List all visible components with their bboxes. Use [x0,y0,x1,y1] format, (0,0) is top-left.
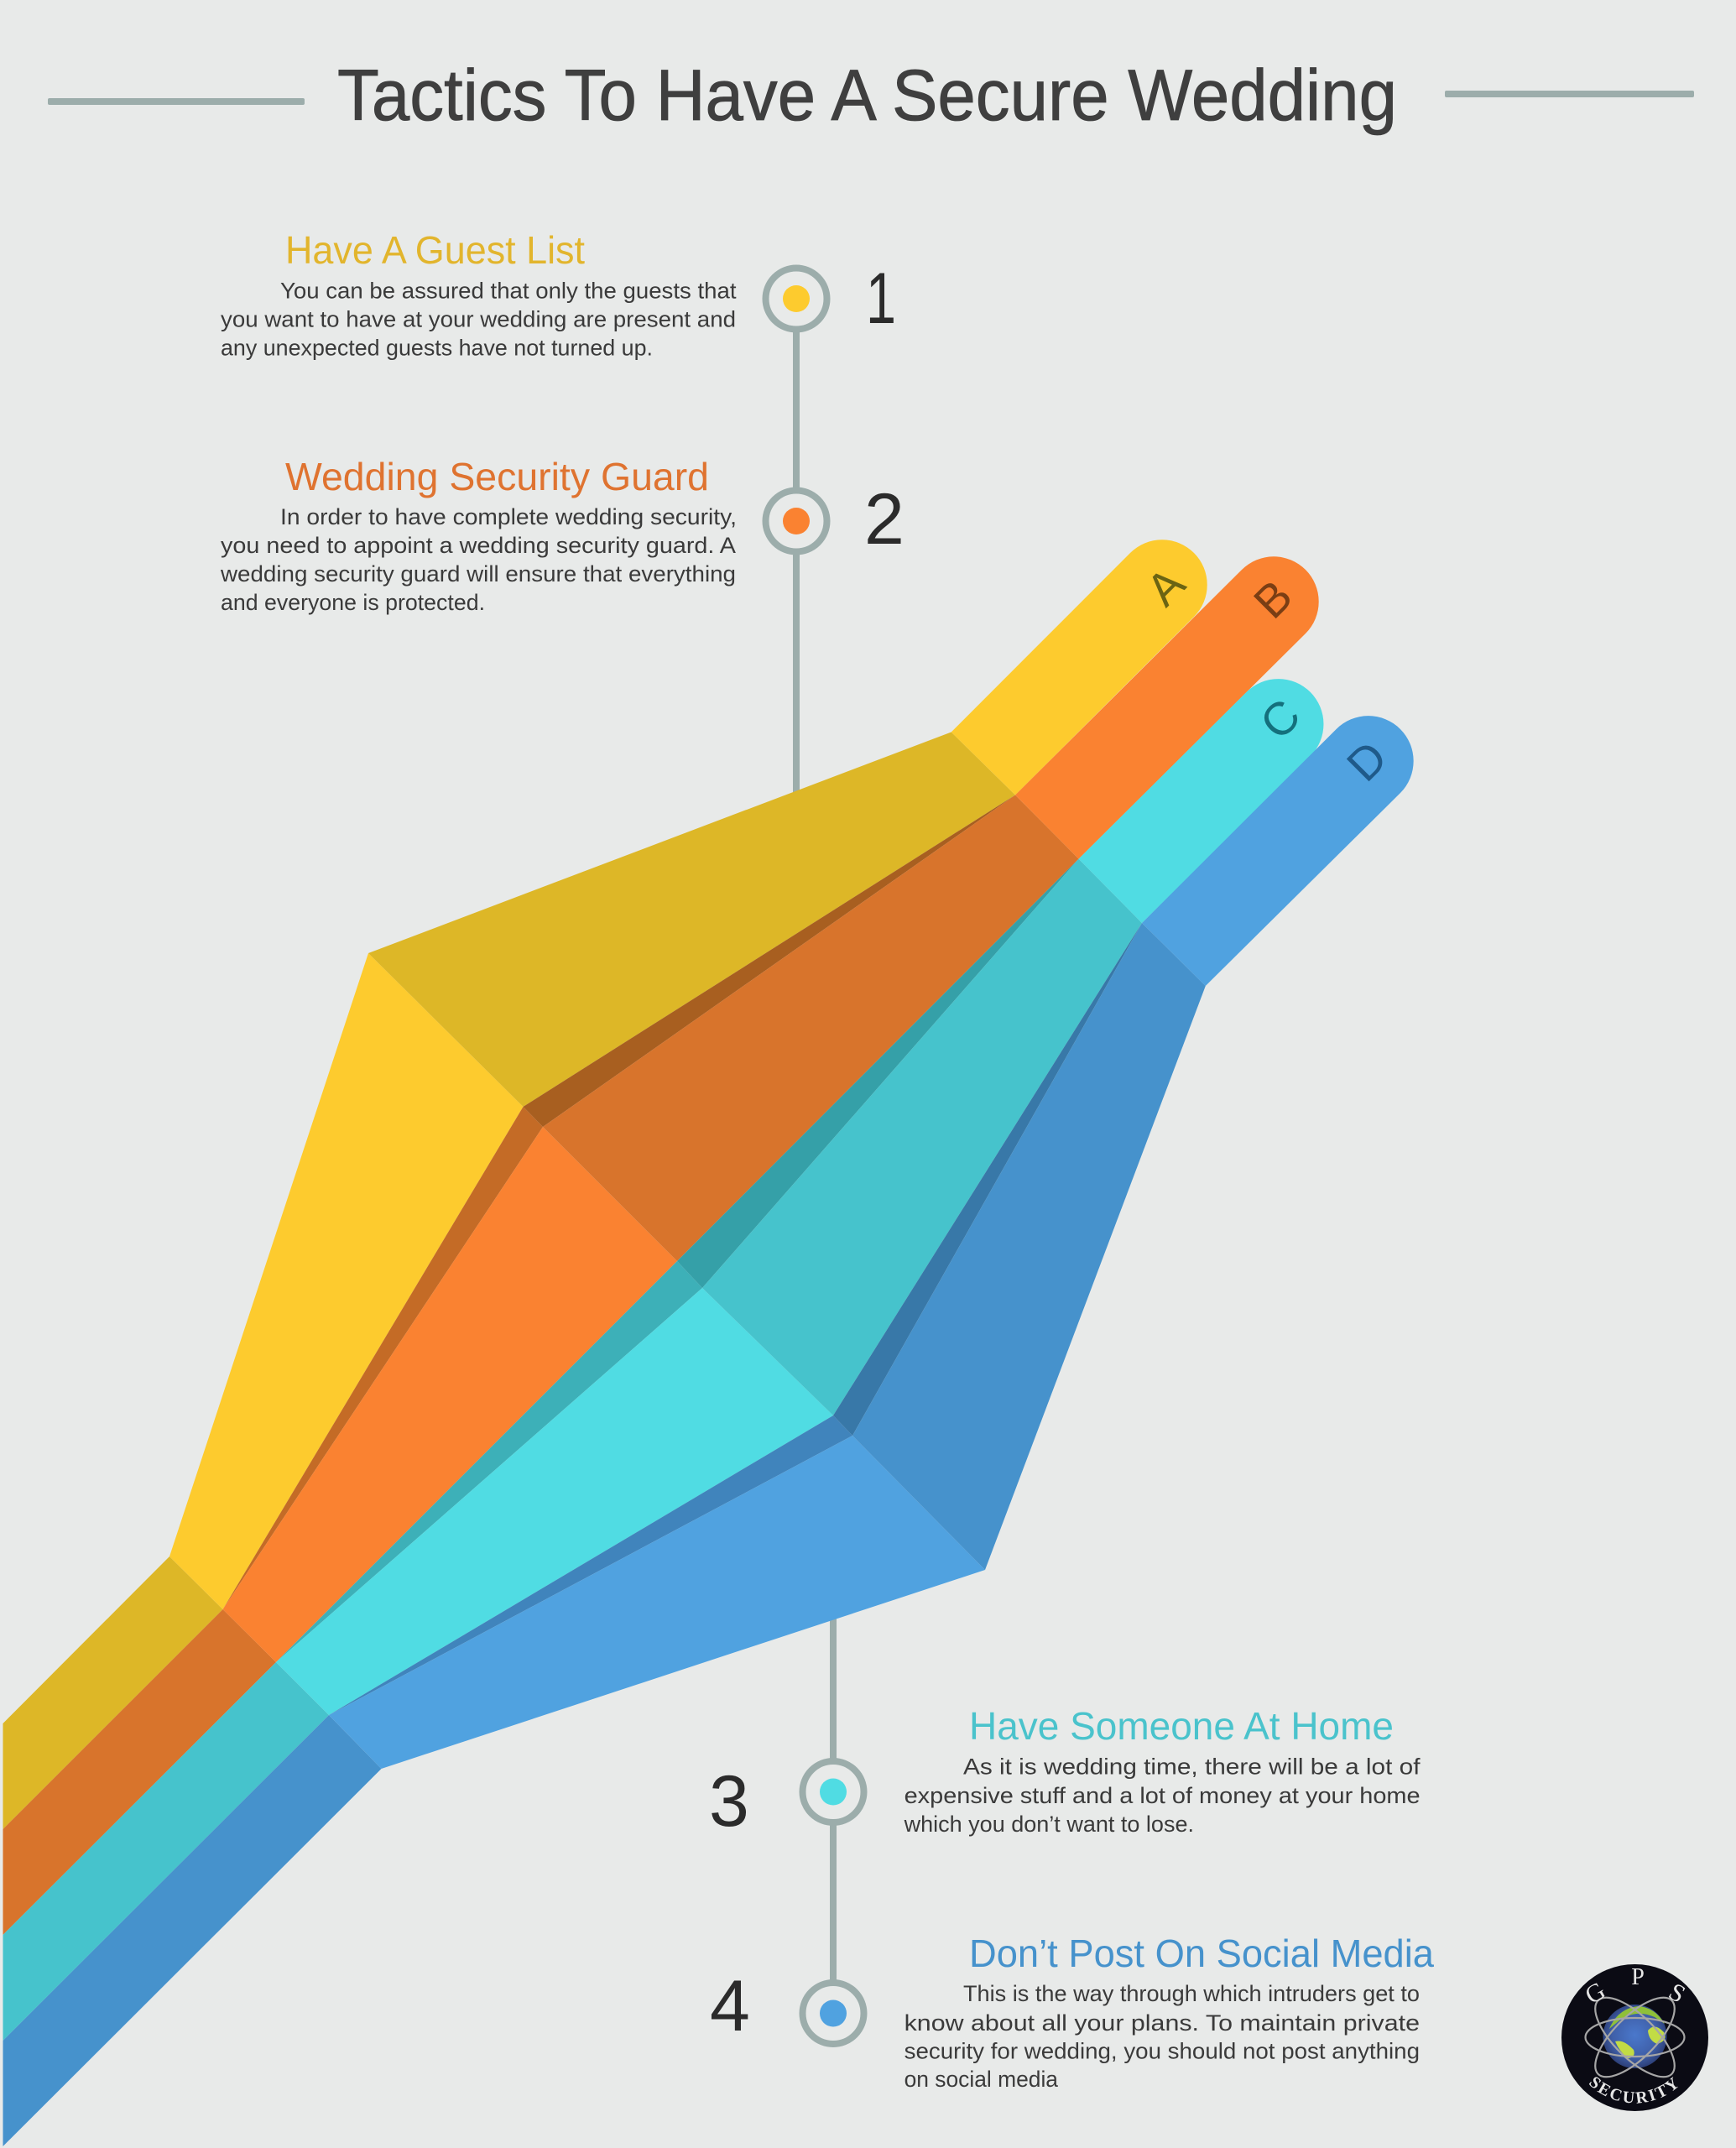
body 2: you need to appoint a wedding security guard. A [221,533,736,558]
title: Tactics To Have A Secure Wedding [337,55,1397,136]
tactic 2 [220,455,904,615]
body 1: any unexpected guests have not turned up. [221,336,653,361]
number 2: 2 [864,479,904,560]
timeline connector bottom [830,1594,837,2014]
finger label A: A [1136,557,1195,616]
finger label D: D [1337,731,1397,791]
heading 3: Have Someone At Home [969,1704,1394,1748]
body 3 [904,1754,1421,1837]
logo: GPS Security: G [1581,1977,1610,2010]
logo: GPS Security: S [1664,1978,1690,2009]
finger label B: B [1243,570,1302,628]
body 3: expensive stuff and a lot of money at your home [904,1783,1421,1808]
marker 4 [802,1983,864,2044]
body 2: In order to have complete wedding security, [280,504,737,529]
number 1: 1 [866,258,896,339]
tactic 4 [710,1932,1434,2092]
body 4: security for wedding, you should not post anything [904,2039,1420,2064]
body 1: you want to have at your wedding are present and [221,307,736,332]
body 4: know about all your plans. To maintain private [904,2010,1420,2036]
body 3: As it is wedding time, there will be a lot of [963,1754,1421,1779]
marker 3 [802,1761,864,1822]
body 4 [904,1981,1420,2092]
heading 2: Wedding Security Guard [285,455,709,498]
logo: GPS Security [1561,1964,1708,2111]
body 2: and everyone is protected. [221,590,485,615]
finger label C: C [1250,689,1311,749]
heading 4: Don’t Post On Social Media [969,1932,1434,1975]
number 3: 3 [709,1761,749,1842]
logo: GPS Security: P [1631,1964,1645,1990]
folded ribbon graphic [3,540,1414,2146]
ribbon A yellow [3,540,1207,1829]
marker 1 [765,268,827,329]
tactic 3 [709,1704,1421,1842]
ribbon C cyan [3,679,1323,2041]
heading 1: Have A Guest List [285,228,585,272]
tactic 1 [221,228,896,361]
number 4: 4 [710,1966,750,2046]
body 1 [221,279,737,361]
ribbon D blue [3,716,1414,2146]
body 4: on social media [904,2067,1059,2092]
body 2 [220,504,737,615]
marker 2 [765,490,827,552]
body 2: wedding security guard will ensure that everything [220,561,736,587]
title [48,55,1694,136]
logo: GPS Security: SECURITY [1589,2077,1678,2104]
timeline connector top [793,299,800,794]
body 1: You can be assured that only the guests that [280,279,737,304]
body 3: which you don’t want to lose. [904,1812,1194,1837]
ribbon B orange [3,556,1319,1935]
body 4: This is the way through which intruders get to [963,1981,1420,2006]
